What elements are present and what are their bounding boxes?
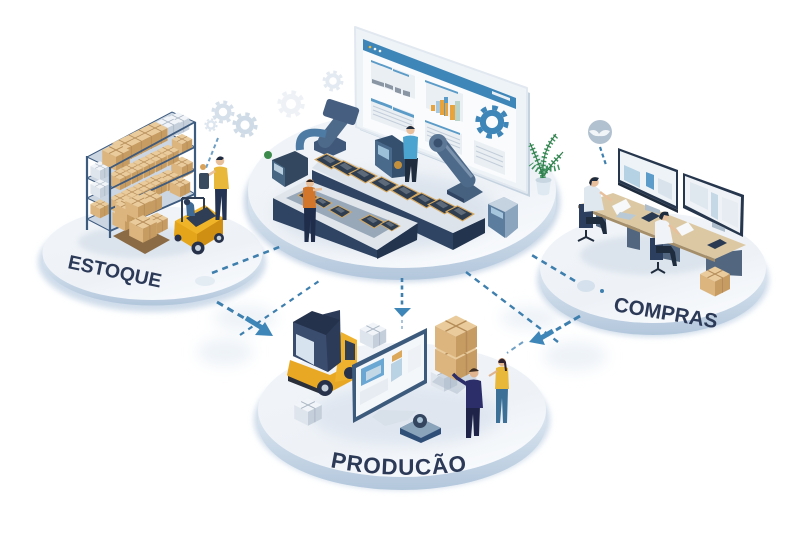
icon: blue gear [478, 108, 506, 136]
icon: office worker one [578, 177, 612, 241]
dashed line: main platform to producao right [466, 272, 558, 342]
icon: central machine [375, 135, 408, 178]
title label: COMPRAS: COMPRAS [612, 293, 719, 333]
gears: stock [205, 102, 256, 136]
monitor one [618, 148, 678, 214]
shelf posts [87, 122, 195, 238]
dashed line: gears to stock worker [206, 138, 218, 168]
boxes: top shelf [102, 112, 189, 171]
icon: worker in orange shirt [303, 179, 322, 242]
conveyor belt items [314, 153, 475, 222]
bar chart [431, 97, 460, 121]
panel: producao platform [254, 343, 550, 490]
monitor two [683, 173, 744, 237]
arrow: compras to producao [507, 316, 580, 353]
dashed line: main platform to producao left [240, 279, 322, 335]
report text lines [373, 106, 503, 167]
icon: small cloud markers [195, 276, 604, 293]
mini charts [372, 79, 410, 97]
boxes: lower shelf levels [90, 134, 193, 218]
screen title bar [363, 39, 516, 109]
icon: left machine [264, 151, 308, 187]
arrow: main platform to producao centre [394, 278, 411, 332]
icon: small machine [400, 414, 441, 443]
boxes: pallet stack [112, 190, 170, 254]
icon: woman in yellow top [489, 358, 509, 423]
icon: office worker two [650, 212, 679, 273]
report header strips [371, 60, 460, 135]
dashed link: main platform to compras [530, 254, 575, 281]
report blocks [371, 60, 505, 175]
dashed line: bubble to compras [600, 147, 606, 165]
panel: front work bench [273, 180, 418, 259]
icon: compras bubble [588, 120, 612, 144]
panel: long conveyor [312, 153, 485, 250]
dashed arrows to producao [217, 272, 580, 353]
icon: stock worker [199, 156, 229, 220]
boxes: compras carton [700, 266, 730, 296]
icon: right robot arm [429, 134, 483, 203]
shelf boards [87, 112, 195, 231]
icon: small right cabinet [488, 197, 518, 238]
icon: left robot arm [300, 98, 360, 157]
panel: main factory platform [244, 112, 560, 282]
dashed link: main platform to estoque [212, 246, 282, 273]
gears: factory [279, 72, 342, 116]
boxes: stacked cartons on pallet [431, 316, 477, 394]
window dots [369, 46, 381, 52]
keyboards and papers [612, 199, 727, 249]
panel: compras desk [578, 148, 746, 276]
panel: estoque platform [38, 206, 266, 312]
soft clouds behind arrows [197, 305, 607, 371]
icon: yellow forklift [174, 198, 224, 254]
icon: worker in blue shirt [403, 126, 418, 182]
panel: stock shelf [87, 112, 195, 238]
text: PRODUCÃO [332, 452, 465, 475]
boxes: producao white cartons [294, 322, 386, 426]
icon: potted plant [530, 134, 563, 196]
shelf front rails [110, 122, 195, 231]
panel: central monitor [352, 328, 427, 426]
title label: PRODUCAO [330, 467, 470, 475]
icon: man in navy suit [453, 368, 483, 438]
panel: dashboard screen [355, 27, 530, 197]
arrow: estoque to producao [217, 302, 273, 336]
icon: transport vehicle [287, 310, 357, 396]
title label: ESTOQUE: ESTOQUE [66, 251, 163, 293]
panel: compras platform [537, 213, 769, 337]
